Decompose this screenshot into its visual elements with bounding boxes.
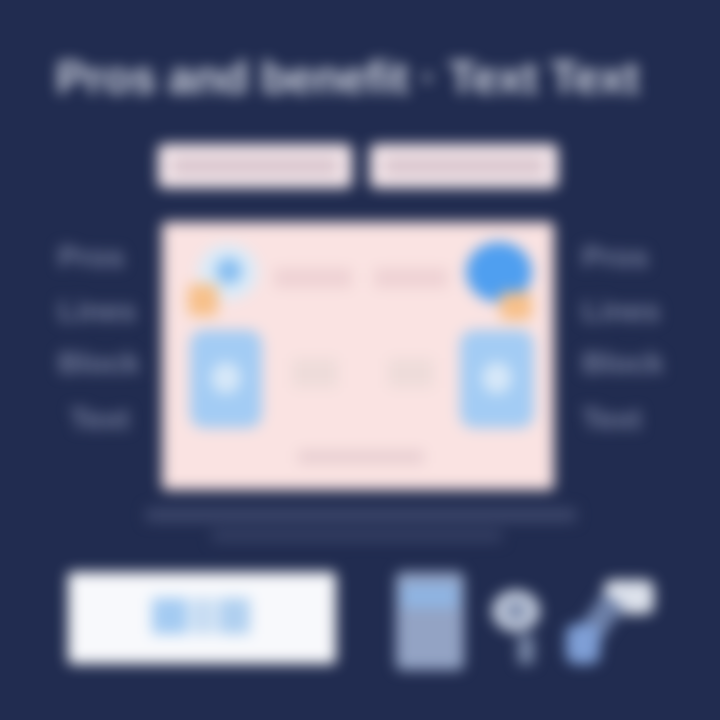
side labels: left: Pros: [58, 241, 125, 274]
caption lines: [146, 504, 576, 542]
blue card: left: [190, 330, 262, 428]
blue card: right: [460, 330, 534, 428]
footer text: [298, 450, 424, 464]
heading pill: left: [158, 144, 352, 188]
icon: magnifier: [482, 580, 550, 672]
icon: right accent: [500, 292, 532, 320]
side labels: right: Text: [582, 403, 641, 436]
middle text left: [292, 358, 338, 388]
icon: left circle: [198, 244, 258, 300]
side labels: left: Lines: [58, 295, 136, 328]
middle text right: [388, 358, 434, 388]
icon: arrow tool: [556, 569, 665, 674]
side labels: left: Text: [70, 403, 129, 436]
bottom table: [68, 572, 336, 664]
title: Pros and benefit · Text Text: [56, 52, 639, 103]
icon: left accent: [188, 284, 218, 316]
side labels: right: Block: [582, 347, 664, 380]
icon: calculator: [396, 572, 464, 670]
side labels: left: Block: [58, 347, 140, 380]
icon: right circle: [466, 242, 532, 302]
side labels: left: [53, 240, 143, 436]
side labels: right: [577, 240, 667, 436]
heading pill: right: [370, 144, 558, 188]
side labels: right: Lines: [582, 295, 660, 328]
table highlight: [152, 598, 188, 634]
header text left: [274, 268, 352, 288]
header text right: [374, 268, 448, 288]
side labels: right: Pros: [582, 241, 649, 274]
central panel: [162, 222, 554, 490]
